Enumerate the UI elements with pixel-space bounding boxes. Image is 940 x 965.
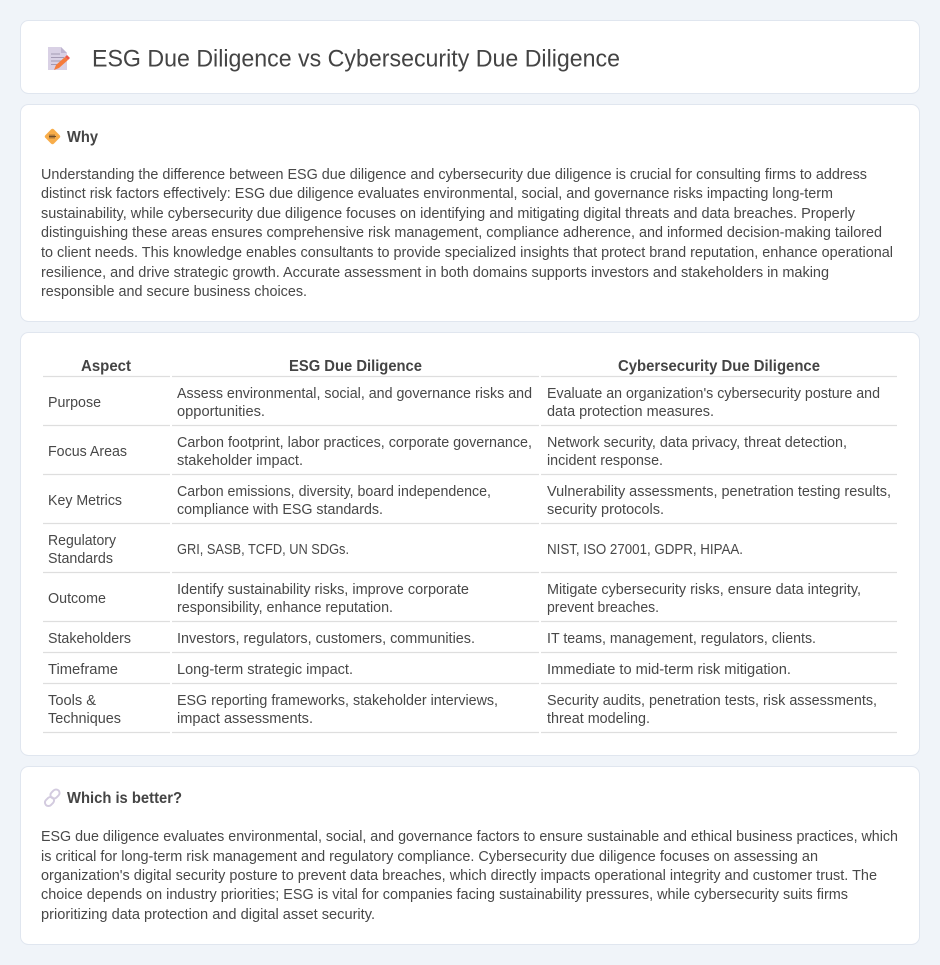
panel: which is better (20, 766, 920, 944)
row: timeframe: Timeframe (48, 662, 118, 678)
table header: Cybersecurity Due Diligence (618, 358, 820, 375)
text block: which is better paragraph: organization's digital security posture to prevent data breaches, which directly impacts operational integrity and customer trust. The (41, 868, 877, 884)
text block: why paragraph: Understanding the difference between ESG due diligence and cybersecurity due diligence is crucial for consulting firms to address (41, 167, 867, 183)
row: stakeholders: IT teams, management, regulators, clients. (547, 631, 816, 647)
text block: why paragraph: sustainability, while cybersecurity due diligence focuses on identifying and mitigating digital threats and data breaches. Properly (41, 206, 856, 222)
row: focus areas: incident response. (547, 453, 663, 469)
text block: which is better paragraph: choice depends on industry priorities; ESG is vital for companies facing sustainability pressures, while cybersecurity suits firms (41, 887, 848, 903)
row: focus areas: Carbon footprint, labor practices, corporate governance, (177, 435, 532, 451)
text block: why paragraph (41, 167, 893, 300)
row: key metrics: Carbon emissions, diversity, board independence, (177, 484, 491, 500)
row: timeframe: Long-term strategic impact. (177, 662, 353, 678)
row: tools and techniques: Security audits, penetration tests, risk assessments, (547, 693, 877, 709)
title: ESG Due Diligence vs Cybersecurity Due Diligence (92, 46, 620, 72)
row: focus areas (48, 435, 847, 469)
row: regulatory standards: GRI, SASB, TCFD, UN SDGs. (177, 542, 349, 558)
table header (81, 358, 820, 375)
row: purpose: Assess environmental, social, and governance risks and (177, 386, 532, 402)
text block: which is better paragraph: is critical for long-term risk management and regulatory compliance. Cybersecurity due diligence focuses on assessing an (41, 849, 818, 865)
row: regulatory standards: Standards (48, 551, 113, 567)
row: purpose (48, 386, 880, 420)
row: outcome: prevent breaches. (547, 600, 659, 616)
text block: why paragraph: to client needs. This knowledge enables consultants to provide specialized insights that protect brand reputation, enhance operational (41, 245, 893, 261)
row: outcome: Outcome (48, 591, 106, 607)
text block: which is better paragraph (41, 829, 898, 923)
text block: which is better paragraph: prioritizing data protection and digital asset security. (41, 907, 375, 923)
row: focus areas: stakeholder impact. (177, 453, 303, 469)
row: regulatory standards: NIST, ISO 27001, GDPR, HIPAA. (547, 542, 743, 558)
row: outcome: Identify sustainability risks, improve corporate (177, 582, 469, 598)
panel: why (20, 104, 920, 322)
table header: ESG Due Diligence (289, 358, 422, 375)
icon: link (43, 788, 61, 808)
row: tools and techniques: Techniques (48, 711, 121, 727)
panel: comparison table (20, 332, 920, 756)
row: focus areas: Network security, data privacy, threat detection, (547, 435, 847, 451)
row: tools and techniques: ESG reporting frameworks, stakeholder interviews, (177, 693, 498, 709)
row: outcome (48, 582, 861, 616)
row: key metrics: Key Metrics (48, 493, 122, 509)
panel: title (20, 20, 920, 94)
row: key metrics: security protocols. (547, 502, 664, 518)
row: timeframe: Immediate to mid-term risk mitigation. (547, 662, 791, 678)
row: tools and techniques (48, 693, 877, 727)
row: stakeholders: Investors, regulators, customers, communities. (177, 631, 475, 647)
icon: warning diamond (44, 128, 61, 145)
row: purpose: Evaluate an organization's cybersecurity posture and (547, 386, 880, 402)
row: regulatory standards: Regulatory (48, 533, 117, 549)
row: tools and techniques: threat modeling. (547, 711, 650, 727)
table header: Aspect (81, 358, 132, 375)
heading: why: Why (67, 129, 98, 146)
text block: why paragraph: resilience, and drive strategic growth. Accurate assessment in both domains supports investors and stakeholders in making (41, 265, 829, 281)
row: outcome: Mitigate cybersecurity risks, ensure data integrity, (547, 582, 861, 598)
row: stakeholders: Stakeholders (48, 631, 131, 647)
text block: which is better paragraph: ESG due diligence evaluates environmental, social, and governance factors to ensure sustainable and ethical business practices, which (41, 829, 898, 845)
row: focus areas: Focus Areas (48, 444, 127, 460)
row: tools and techniques: impact assessments. (177, 711, 313, 727)
heading: which is better: Which is better? (67, 790, 182, 807)
row: key metrics: compliance with ESG standards. (177, 502, 383, 518)
row: regulatory standards (48, 533, 743, 567)
row: purpose: Purpose (48, 395, 101, 411)
text block: why paragraph: distinguishing these areas ensures comprehensive risk management, compliance adherence, and informed decision-making tailored (41, 225, 882, 241)
text block: why paragraph: distinct risk factors effectively: ESG due diligence evaluates environmental, social, and governance risks impacting long-term (41, 186, 833, 202)
row: purpose: opportunities. (177, 404, 265, 420)
row: timeframe (48, 662, 791, 678)
text block: why paragraph: responsible and secure business choices. (41, 284, 307, 300)
row: key metrics (48, 484, 891, 518)
row: stakeholders (48, 631, 816, 647)
icon: document with pencil (48, 47, 70, 70)
row: outcome: responsibility, enhance reputation. (177, 600, 393, 616)
row: tools and techniques: Tools & (48, 693, 96, 709)
row: purpose: data protection measures. (547, 404, 714, 420)
row: key metrics: Vulnerability assessments, penetration testing results, (547, 484, 891, 500)
